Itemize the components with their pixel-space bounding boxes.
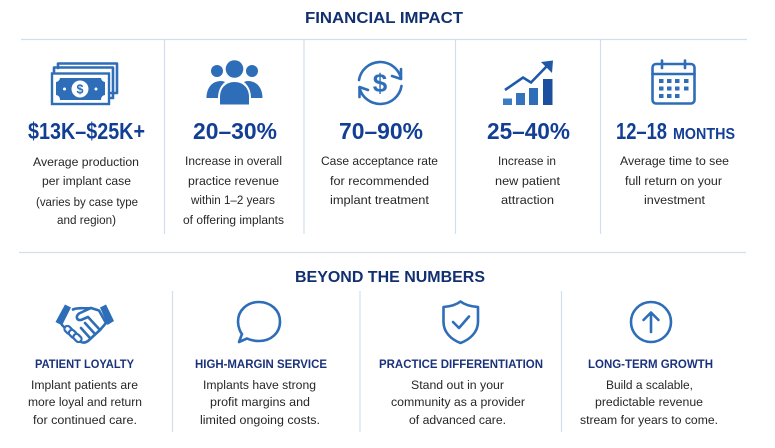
icon: dollar cycle (359, 62, 402, 104)
description: high-margin service (200, 378, 320, 427)
icon: speech bubble (238, 302, 280, 342)
subheading: high-margin service: HIGH-MARGIN SERVICE (195, 357, 327, 371)
description: patient loyalty: more loyal and return (28, 395, 142, 409)
stat: attraction increase: 25–40% (487, 118, 570, 144)
description: practice revenue (183, 154, 284, 227)
description: long-term growth (580, 378, 718, 427)
description: long-term growth: predictable revenue (595, 395, 703, 409)
description: average production (33, 155, 139, 227)
icon: handshake (56, 304, 114, 343)
stat: months to return (616, 118, 735, 144)
description: patient attraction: attraction (501, 193, 554, 207)
stat: production range: $13K–$25K+ (28, 118, 145, 144)
description: long-term growth: stream for years to come. (580, 413, 718, 427)
description: case acceptance: implant treatment (330, 193, 430, 207)
description: return timeline: investment (644, 193, 706, 207)
panel: patient loyalty (28, 304, 142, 427)
panel: case acceptance (321, 62, 438, 207)
icon: shield with check (444, 302, 478, 343)
description: practice revenue: Increase in overall (185, 154, 282, 168)
description: patient loyalty: for continued care. (33, 413, 137, 427)
description: return timeline: full return on your (625, 174, 722, 188)
description: patient attraction: Increase in (498, 154, 556, 168)
panel: practice differentiation (379, 302, 543, 427)
description: average production: (varies by case type (36, 195, 138, 209)
description: return timeline (620, 154, 729, 207)
panel: practice revenue (183, 60, 284, 227)
description: practice revenue: practice revenue (188, 174, 279, 188)
heading: beyond the numbers: BEYOND THE NUMBERS (295, 269, 485, 286)
icon: banknotes (52, 64, 117, 104)
icon: rising bar chart (503, 60, 553, 105)
description: long-term growth: Build a scalable, (606, 378, 693, 392)
panel: patient attraction (487, 60, 570, 207)
stat: revenue increase: 20–30% (193, 118, 277, 144)
description: high-margin service: Implants have strong (203, 378, 316, 392)
description: case acceptance: Case acceptance rate (321, 154, 438, 168)
stat: months to return: MONTHS (673, 126, 735, 143)
subheading: patient loyalty: PATIENT LOYALTY (35, 357, 134, 371)
description: practice differentiation: Stand out in your (411, 378, 504, 392)
description: practice differentiation: of advanced care. (409, 413, 506, 427)
stat: acceptance rate: 70–90% (339, 118, 423, 144)
description: high-margin service: limited ongoing costs. (200, 413, 320, 427)
description: average production: per implant case (42, 174, 131, 188)
title: financial impact: FINANCIAL IMPACT (305, 10, 463, 27)
description: patient attraction (495, 154, 561, 207)
description: case acceptance (321, 154, 438, 207)
description: high-margin service: profit margins and (210, 395, 310, 409)
description: average production: Average production (33, 155, 139, 169)
panel: return timeline (616, 60, 735, 207)
subheading: long-term growth: LONG-TERM GROWTH (588, 357, 713, 371)
description: return timeline: Average time to see (620, 154, 729, 168)
description: patient loyalty (28, 378, 142, 427)
icon: up arrow in circle (631, 302, 671, 342)
subheading: practice differentiation: PRACTICE DIFFERENTIATION (379, 357, 543, 371)
icon: dollar cycle: $ (373, 68, 388, 98)
description: patient attraction: new patient (495, 174, 561, 188)
icon: group of people (206, 60, 262, 104)
icon: calendar (652, 60, 694, 104)
description: practice revenue: within 1–2 years (190, 193, 275, 207)
panel: long-term growth (580, 302, 718, 427)
description: practice differentiation: community as a provider (391, 395, 525, 409)
panel: high-margin service (195, 302, 327, 427)
description: case acceptance: for recommended (330, 174, 429, 188)
panel: average production (28, 64, 145, 227)
description: average production: and region) (57, 213, 116, 227)
description: practice revenue: of offering implants (183, 213, 284, 227)
icon: banknotes: $ (77, 82, 84, 96)
description: practice differentiation (391, 378, 525, 427)
stat: months to return: 12–18 (616, 118, 667, 144)
description: patient loyalty: Implant patients are (31, 378, 138, 392)
